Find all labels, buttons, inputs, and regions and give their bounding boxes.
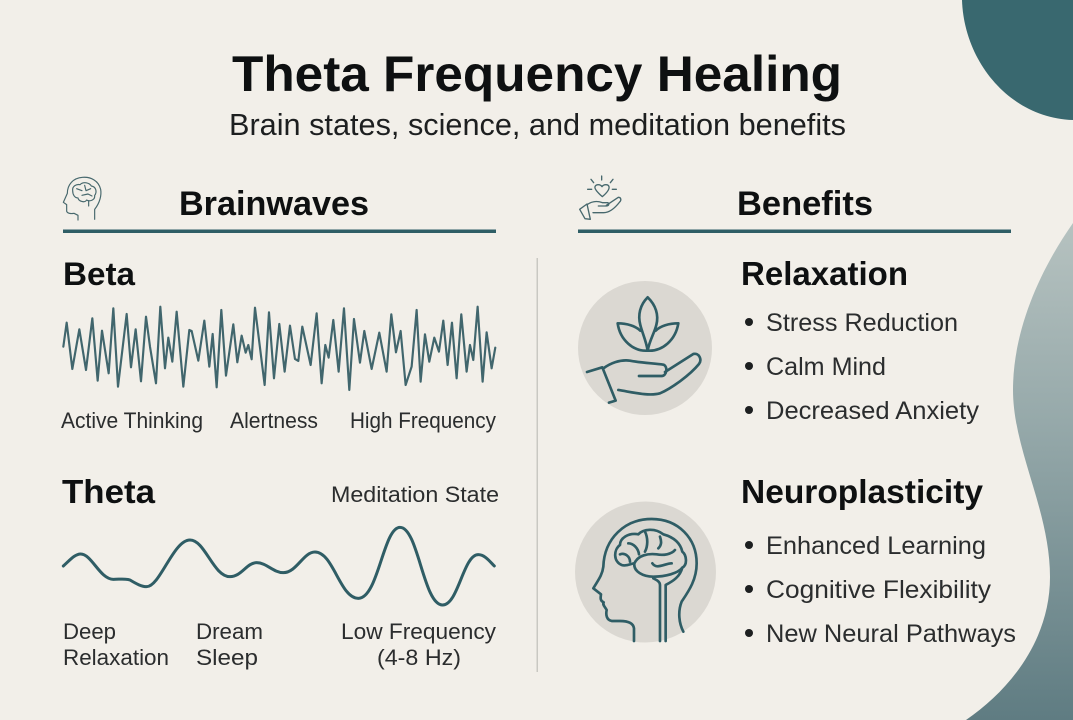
label: deep relaxation: Relaxation — [63, 645, 169, 670]
list: relaxation benefits: Stress Reduction — [766, 309, 958, 337]
list: neuroplasticity benefits: Cognitive Flexibility — [766, 576, 992, 604]
label: dream sleep: Sleep — [196, 645, 258, 670]
list: neuroplasticity benefits: Enhanced Learning — [766, 532, 986, 560]
beta section — [61, 256, 496, 433]
theta section — [62, 473, 499, 670]
heading rule — [578, 230, 1011, 233]
decorative blob: right edge — [966, 223, 1073, 720]
chart: beta wave — [63, 307, 495, 390]
benefit: relaxation — [578, 255, 980, 425]
label: low frequency range: (4-8 Hz) — [377, 645, 461, 670]
label: high frequency: High Frequency — [350, 408, 496, 433]
heading: brainwaves: Brainwaves — [179, 185, 369, 223]
icon: hand with heart — [580, 176, 621, 219]
subtitle: Brain states, science, and meditation benefits — [229, 107, 846, 142]
heading: theta: Theta — [62, 473, 156, 510]
heading rule — [63, 230, 496, 233]
heading: neuroplasticity: Neuroplasticity — [741, 473, 984, 510]
decorative blob: top right — [962, 0, 1073, 120]
chart: theta wave — [63, 527, 494, 605]
heading: beta: Beta — [63, 256, 135, 292]
benefit: neuroplasticity — [575, 473, 1016, 648]
label: low frequency range: Low Frequency — [341, 619, 496, 644]
title: Theta Frequency Healing — [232, 46, 842, 102]
label: active thinking: Active Thinking — [61, 408, 203, 433]
label: meditation state: Meditation State — [331, 482, 499, 507]
label: deep relaxation — [63, 619, 169, 670]
label: dream sleep: Dream — [196, 619, 263, 644]
icon: hand holding leaves — [578, 281, 712, 415]
list: relaxation benefits: Calm Mind — [766, 353, 886, 381]
list: relaxation benefits — [745, 309, 980, 425]
icon: head with brain — [575, 502, 716, 642]
list: neuroplasticity benefits: New Neural Pathways — [766, 620, 1016, 648]
list: neuroplasticity benefits — [745, 532, 1016, 648]
label: dream sleep — [196, 619, 263, 670]
icon: head with brain — [63, 177, 101, 220]
panel: benefits — [575, 176, 1016, 648]
label: low frequency range — [341, 619, 496, 670]
label: deep relaxation: Deep — [63, 619, 116, 644]
list: relaxation benefits: Decreased Anxiety — [766, 397, 980, 425]
label: alertness: Alertness — [230, 408, 318, 433]
heading: benefits: Benefits — [737, 185, 873, 223]
heading: relaxation: Relaxation — [741, 255, 908, 292]
panel: brainwaves — [61, 177, 499, 670]
